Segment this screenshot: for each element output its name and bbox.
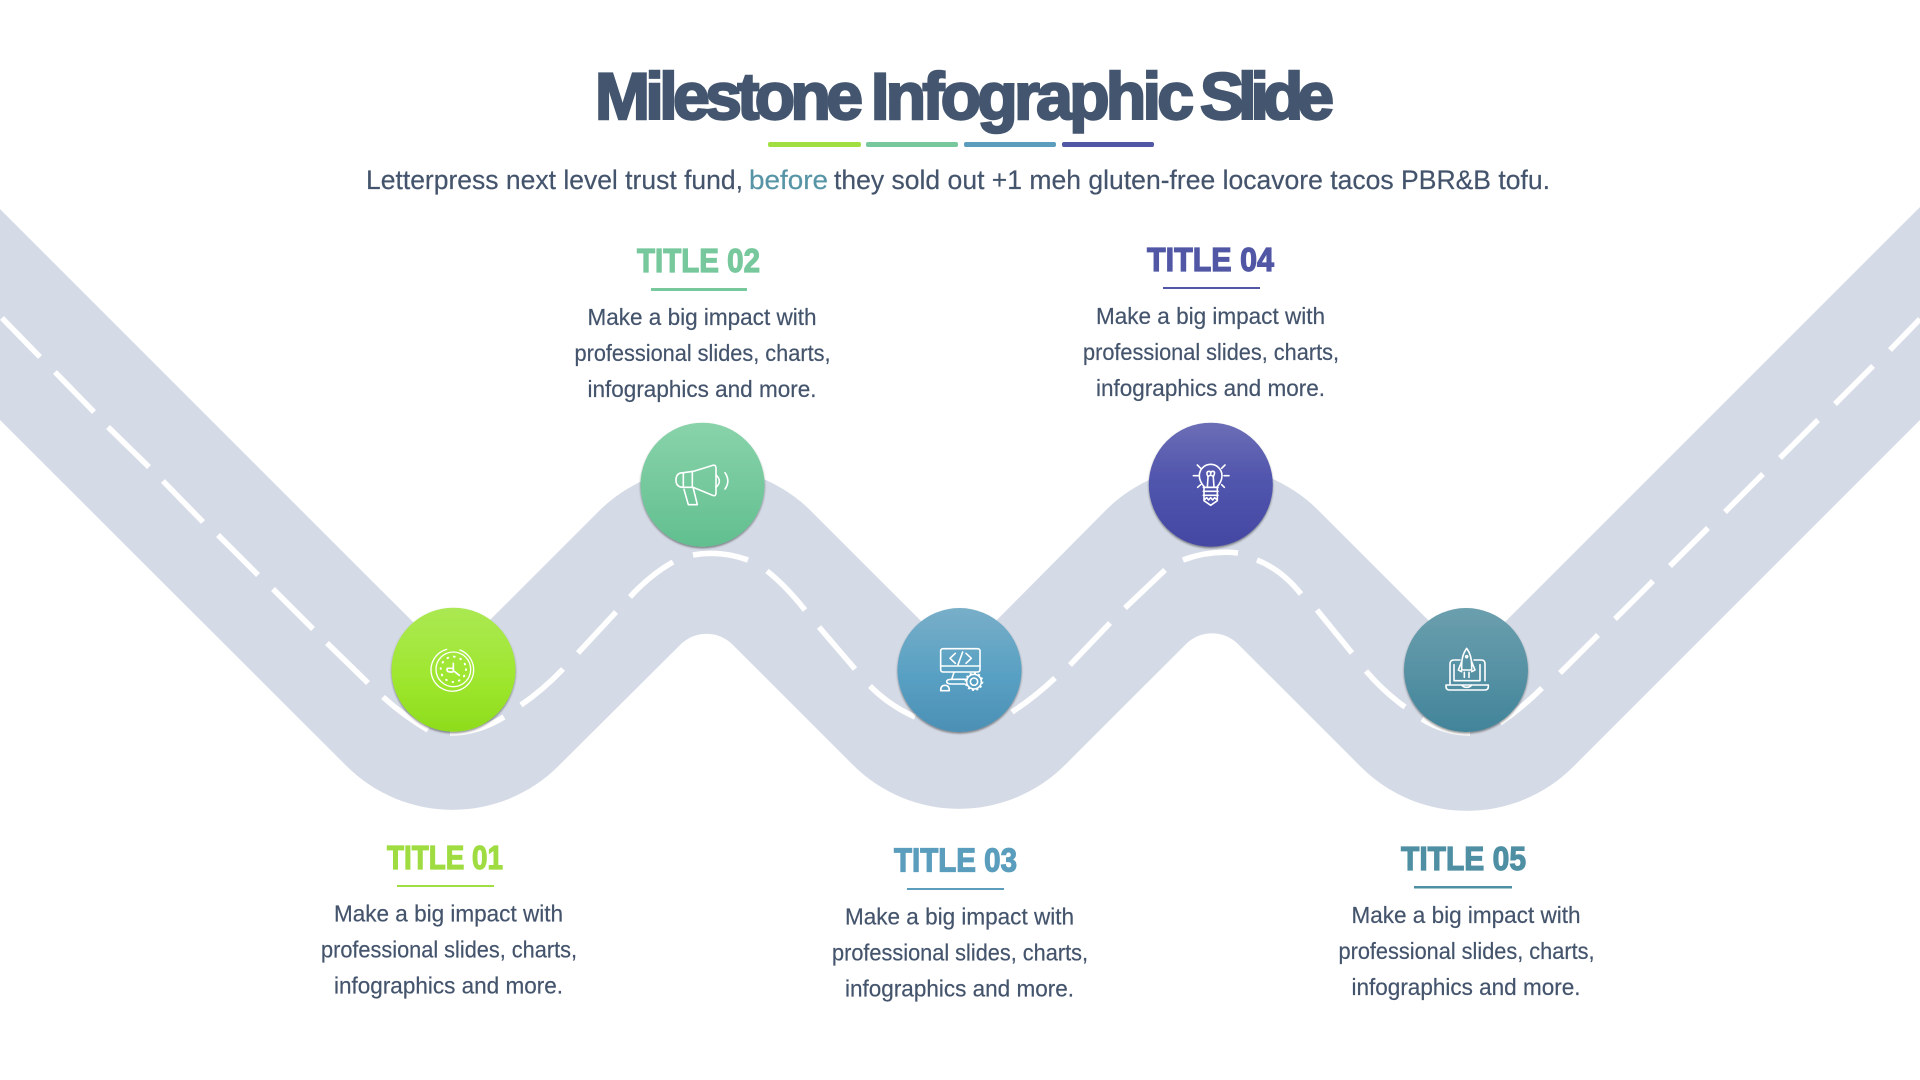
milestone 3 circle	[898, 608, 1022, 732]
text block: title 04	[1083, 241, 1339, 401]
text block: title 02: Make a big impact with	[588, 304, 816, 330]
road	[0, 207, 1920, 811]
text block: title 04: Make a big impact with	[1096, 303, 1325, 329]
icon: clock	[431, 649, 474, 691]
text block: title 05	[1338, 840, 1594, 1000]
subtitle: Letterpress next level trust fund,	[366, 165, 743, 195]
milestone 1 circle	[392, 608, 516, 732]
text block: title 03: infographics and more.	[845, 976, 1074, 1002]
text block: title 05: professional slides, charts,	[1338, 938, 1594, 964]
text block: title 05: infographics and more.	[1352, 974, 1580, 1000]
milestone 5 circle	[1404, 608, 1528, 732]
text block: title 01: TITLE 01	[387, 839, 503, 876]
milestone 2 circle	[640, 423, 764, 547]
subtitle	[366, 165, 1550, 195]
text block: title 04: professional slides, charts,	[1083, 339, 1339, 365]
title: Infographic	[871, 59, 1194, 133]
subtitle: before	[749, 165, 828, 195]
text block: title 01	[321, 839, 577, 998]
icon: megaphone	[676, 465, 728, 505]
title: Milestone	[595, 59, 863, 133]
text block: title 02	[574, 242, 830, 402]
text block: title 01: Make a big impact with	[334, 901, 563, 927]
road centre dashes	[2, 318, 1920, 733]
text block: title 03: Make a big impact with	[845, 904, 1074, 930]
text block: title 02: infographics and more.	[588, 376, 816, 402]
title colour underline	[768, 142, 1154, 147]
icon: rocket and laptop	[1446, 648, 1488, 690]
icon: computer with gear	[941, 649, 982, 691]
text block: title 03: TITLE 03	[894, 842, 1017, 878]
text block: title 03	[832, 842, 1088, 1002]
milestone 4 circle	[1149, 423, 1273, 547]
text block: title 04: infographics and more.	[1096, 375, 1325, 401]
title: Slide	[1200, 59, 1334, 133]
icon: light bulb	[1193, 464, 1229, 505]
text block: title 04: TITLE 04	[1147, 241, 1275, 278]
title	[595, 59, 1334, 133]
text block: title 01: professional slides, charts,	[321, 936, 577, 962]
text block: title 03: professional slides, charts,	[832, 940, 1088, 966]
text block: title 02: professional slides, charts,	[574, 340, 830, 366]
text block: title 05: TITLE 05	[1401, 840, 1526, 877]
text block: title 01: infographics and more.	[334, 972, 563, 998]
text block: title 05: Make a big impact with	[1352, 902, 1580, 928]
text block: title 02: TITLE 02	[637, 242, 760, 279]
subtitle: they sold out +1 meh gluten-free locavore tacos PBR&B tofu.	[834, 165, 1550, 195]
